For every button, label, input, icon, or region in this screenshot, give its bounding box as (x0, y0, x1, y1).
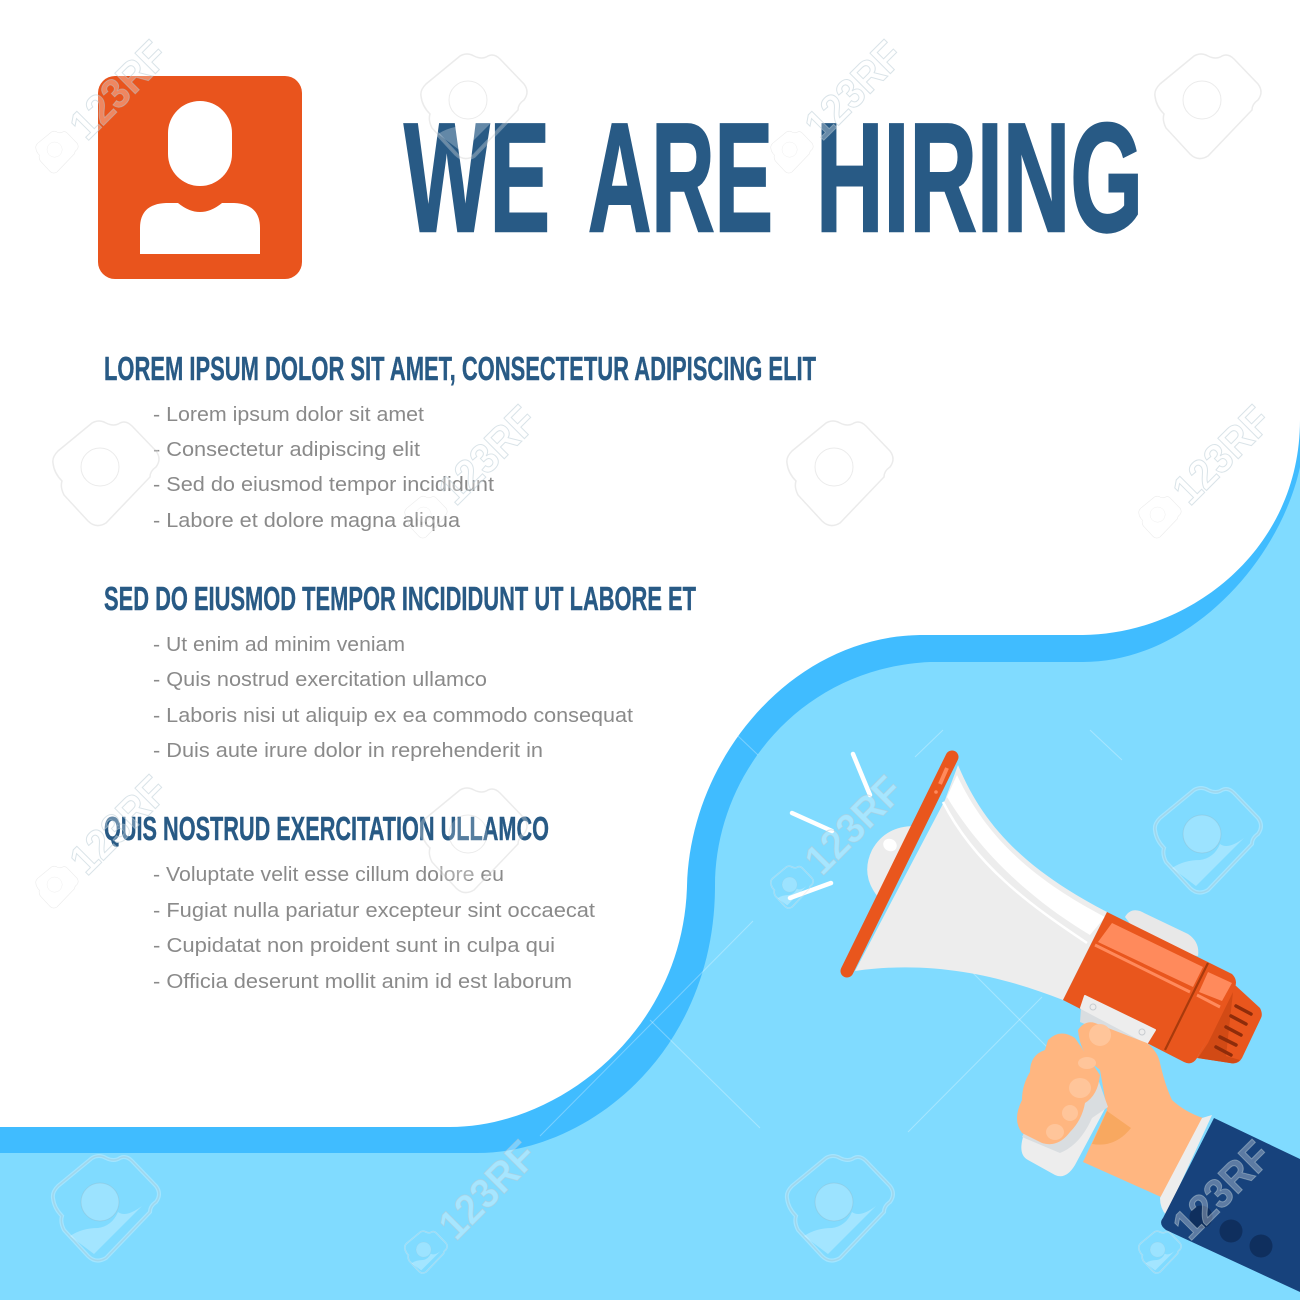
title: ARE (588, 91, 773, 264)
title (404, 91, 1143, 264)
section 1 list: - Consectetur adipiscing elit (153, 439, 420, 461)
section 3 list: - Fugiat nulla pariatur excepteur sint occaecat (153, 900, 595, 922)
section 2 list (153, 634, 633, 762)
section 3 list (153, 864, 595, 993)
watermark text: 123RF (1163, 1132, 1280, 1248)
watermark text: 123RF (429, 1132, 546, 1248)
section 1 list: - Lorem ipsum dolor sit amet (153, 404, 424, 426)
watermark text: 123RF (795, 32, 912, 148)
handle grip (1021, 1065, 1108, 1176)
watermark small eggs (36, 131, 1181, 1273)
shirt cuff (1160, 1115, 1212, 1215)
section 2 (104, 580, 696, 762)
background light blue area (0, 467, 1300, 1300)
faint diagonal lines (540, 730, 1132, 1136)
section 1 list: - Labore et dolore magna aliqua (153, 510, 461, 532)
megaphone horn (855, 765, 1107, 1000)
section 2 list: - Ut enim ad minim veniam (153, 634, 405, 656)
lower handle bracket (1080, 996, 1155, 1048)
watermark text: 123RF (60, 767, 177, 883)
megaphone rim (847, 757, 952, 971)
section 3 list: - Officia deserunt mollit anim id est laborum (153, 971, 572, 993)
watermark text: 123RF (60, 32, 177, 148)
section 1 list: - Sed do eiusmod tempor incididunt (153, 474, 494, 496)
megaphone in hand illustration (790, 754, 1300, 1292)
top handle plate (1125, 910, 1198, 956)
section 1 (104, 350, 816, 532)
title: WE (404, 91, 550, 264)
section 2 list: - Quis nostrud exercitation ullamco (153, 669, 487, 691)
section 3 (104, 810, 595, 993)
section 3 list: - Voluptate velit esse cillum dolore eu (153, 864, 504, 886)
watermark text: 123RF (795, 767, 912, 883)
section 2 list: - Duis aute irure dolor in reprehenderit in (153, 740, 543, 762)
megaphone rear cone (1197, 985, 1262, 1063)
megaphone body (1063, 912, 1236, 1063)
watermark text: 123RF (1163, 397, 1280, 513)
section 1 list (153, 404, 494, 532)
hand palm (1078, 1022, 1203, 1197)
profile icon (98, 76, 302, 279)
section 1 heading: LOREM IPSUM DOLOR SIT AMET, CONSECTETUR ADIPISCING ELIT (104, 350, 816, 387)
sound sparks (790, 754, 870, 898)
background wave band (0, 420, 1300, 1300)
section 2 heading: SED DO EIUSMOD TEMPOR INCIDIDUNT UT LABORE ET (104, 580, 696, 617)
section 2 list: - Laboris nisi ut aliquip ex ea commodo consequat (153, 705, 633, 727)
megaphone back dome (867, 826, 915, 897)
section 3 heading: QUIS NOSTRUD EXERCITATION ULLAMCO (104, 810, 549, 847)
watermark text: 123RF (429, 397, 546, 513)
section 3 list: - Cupidatat non proident sunt in culpa qui (153, 935, 555, 957)
hand fist (1017, 1024, 1111, 1144)
suit sleeve (1161, 1118, 1300, 1292)
